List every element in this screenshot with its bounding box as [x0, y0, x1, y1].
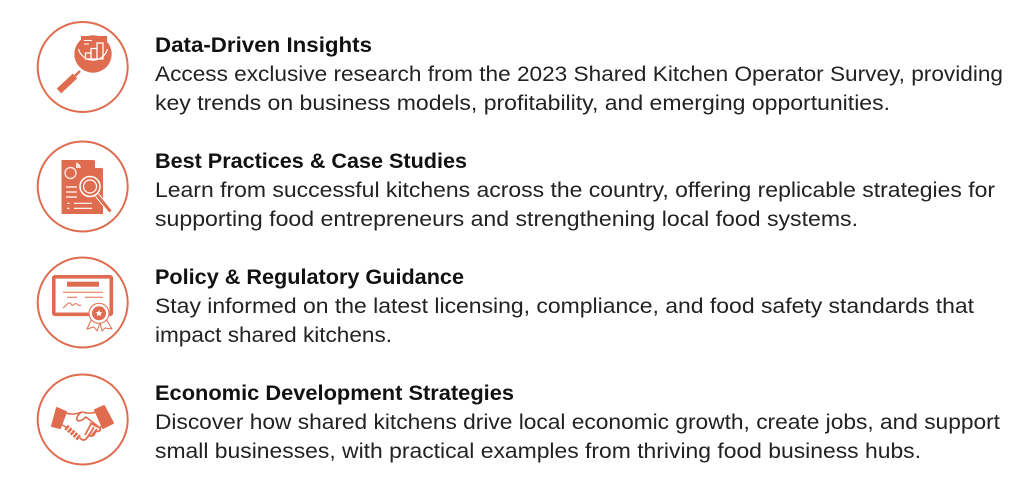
description: key trends on business models, profitability, and emerging opportunities.: [155, 92, 890, 115]
item: economic development: [38, 374, 1000, 464]
description: Access exclusive research from the 2023 Shared Kitchen Operator Survey, providing: [155, 63, 1003, 86]
heading: Best Practices & Case Studies: [155, 149, 467, 173]
description: [155, 179, 995, 231]
icon: document with magnifier: [38, 142, 128, 232]
icon: handshake: [38, 374, 128, 464]
description: small businesses, with practical examples from thriving food business hubs.: [155, 440, 921, 463]
icon: certificate: [38, 258, 128, 348]
description: Discover how shared kitchens drive local economic growth, create jobs, and support: [155, 411, 1000, 434]
description: [155, 411, 1000, 463]
description: supporting food entrepreneurs and strengthening local food systems.: [155, 208, 858, 231]
item: policy guidance: [38, 258, 974, 348]
description: Stay informed on the latest licensing, compliance, and food safety standards that: [155, 295, 974, 318]
description: Learn from successful kitchens across the country, offering replicable strategies for: [155, 179, 995, 202]
heading: Economic Development Strategies: [155, 381, 514, 405]
item: data-driven insights: [38, 22, 1003, 115]
icon: magnifier over report: [38, 22, 128, 112]
heading: Data-Driven Insights: [155, 33, 372, 57]
item: best practices: [38, 142, 995, 232]
heading: Policy & Regulatory Guidance: [155, 265, 464, 289]
description: impact shared kitchens.: [155, 324, 392, 347]
description: [155, 63, 1003, 115]
description: [155, 295, 974, 347]
